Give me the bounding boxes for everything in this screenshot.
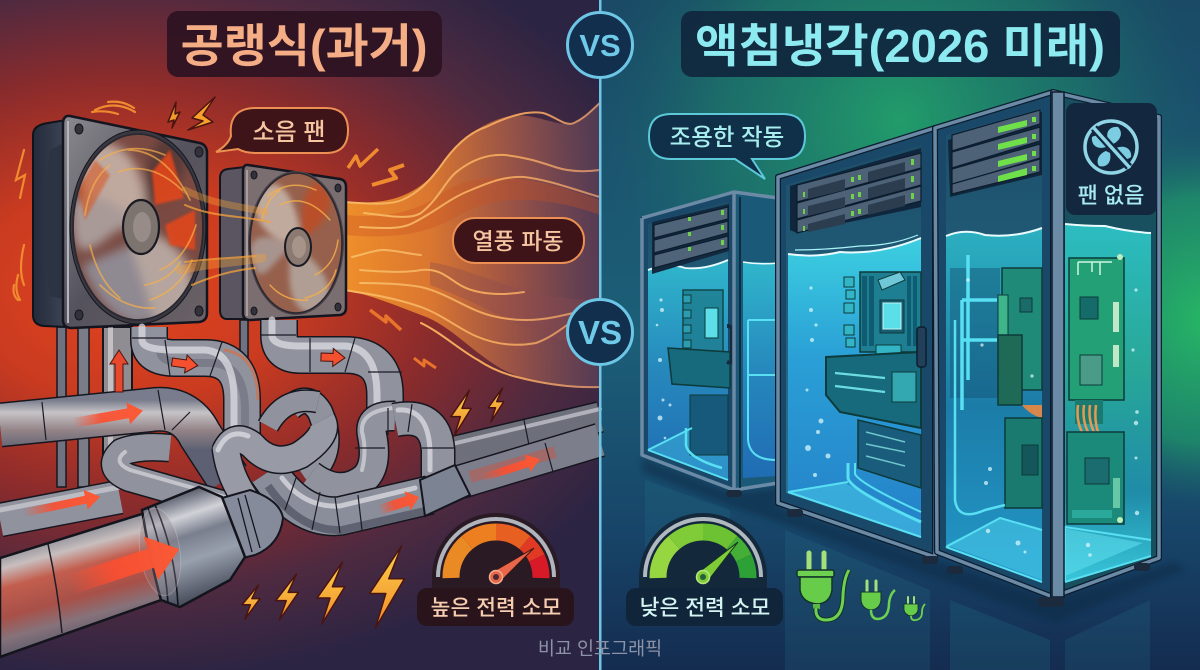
gauge: high power consumption: 높은 전력 소모 [431, 596, 561, 620]
noise marks around large fan [14, 102, 135, 300]
tank front-left face [778, 128, 935, 557]
callout: quiet operation [649, 114, 805, 179]
tank center face [935, 92, 1053, 597]
copper pipe network [0, 320, 600, 560]
flow arrows [21, 348, 543, 607]
hot air streams between fans [180, 190, 270, 285]
icon: small power plug [904, 597, 925, 620]
VS badge: middle [568, 300, 632, 364]
server units with green status bars [948, 110, 1042, 197]
submerged circuit boards right [1067, 254, 1124, 524]
gauge: low power consumption: 낮은 전력 소모 [640, 596, 770, 620]
VS badge: top: VS [579, 28, 621, 63]
submerged circuit boards [946, 255, 1042, 582]
tank right face [1052, 92, 1159, 597]
callout: hot air wave [453, 218, 584, 263]
fan: large noisy fan [33, 116, 207, 328]
caption: 비교 인포그래픽 [538, 638, 662, 659]
icon: crossed-out fan [1085, 121, 1137, 173]
center divider line [599, 0, 602, 670]
callout: noisy fan: 소음 팬 [253, 119, 325, 146]
lightning bolts: power surge [242, 388, 504, 628]
server rack: small rear tank [642, 192, 778, 490]
server units in large tank [790, 148, 921, 233]
server units in small tank [652, 204, 729, 274]
title: air cooling: 공랭식(과거) [180, 20, 428, 72]
VS badge: top [568, 12, 632, 78]
VS badge: middle: VS [578, 314, 622, 351]
submerged motherboard [788, 272, 921, 537]
heat wave stream [344, 100, 600, 388]
icon: large power plug [797, 553, 849, 620]
submerged board in small tank [648, 290, 776, 480]
callout: quiet operation: 조용한 작동 [670, 124, 784, 150]
thin vertical support pipes [57, 320, 248, 487]
panel: immersion cooling illustration [626, 92, 1185, 670]
background: air cooling side [0, 0, 600, 670]
lightning sparks near fans [168, 97, 436, 368]
background: immersion cooling side [600, 0, 1200, 670]
gauge: high power consumption [417, 513, 574, 626]
server rack: large immersion tank [726, 92, 1159, 607]
callout: noisy fan [216, 108, 348, 153]
floor reflections [642, 458, 1185, 670]
large foreground pipe with coupling [0, 487, 245, 657]
badge: no fan [1066, 103, 1157, 215]
gauge: low power consumption [626, 513, 783, 626]
title: air cooling [167, 11, 442, 77]
fan: small noisy fan [220, 165, 346, 320]
callout: hot air wave: 열풍 파동 [472, 228, 564, 254]
panel: air cooling illustration [0, 97, 600, 657]
title: immersion cooling: 액침냉각(2026 미래) [695, 20, 1105, 72]
badge: no fan: 팬 없음 [1078, 183, 1144, 208]
icon: medium power plug [861, 581, 895, 619]
